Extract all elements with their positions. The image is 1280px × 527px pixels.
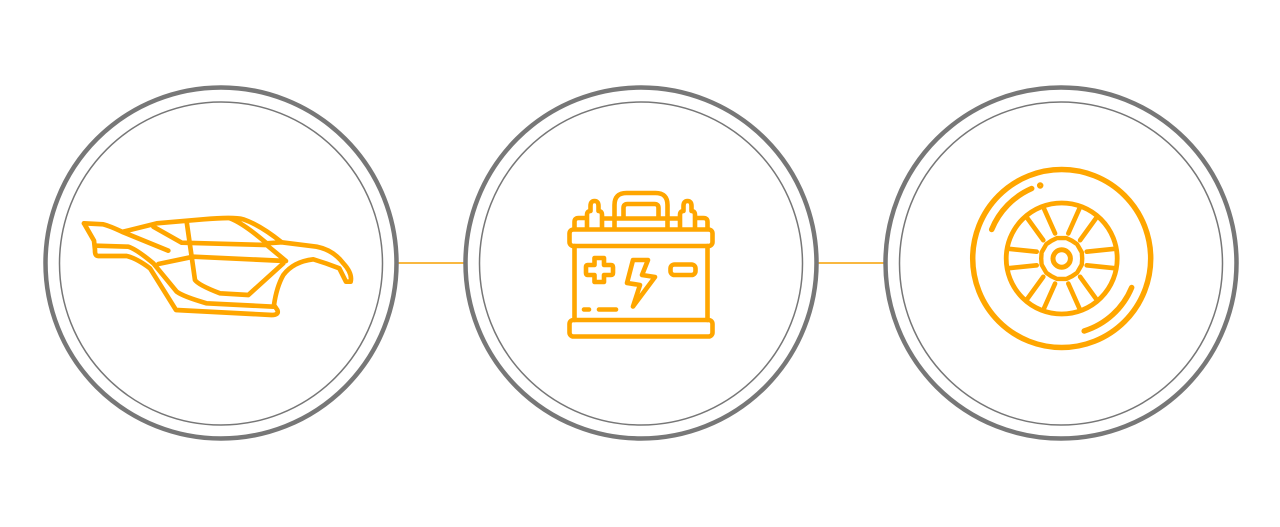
panel: wheel circle <box>886 88 1236 438</box>
icon: plus sign <box>586 258 613 282</box>
connector line: body to battery <box>398 262 464 264</box>
panel: battery circle <box>466 88 816 438</box>
battery dashes <box>584 307 616 312</box>
icon: car body shell <box>84 218 351 315</box>
panel: car body circle <box>46 88 396 438</box>
icon: minus sign <box>670 264 696 275</box>
icon: car battery <box>570 193 712 336</box>
connector line: battery to wheel <box>818 262 884 264</box>
icon: lightning bolt <box>627 260 655 306</box>
icon: wheel <box>973 170 1151 348</box>
